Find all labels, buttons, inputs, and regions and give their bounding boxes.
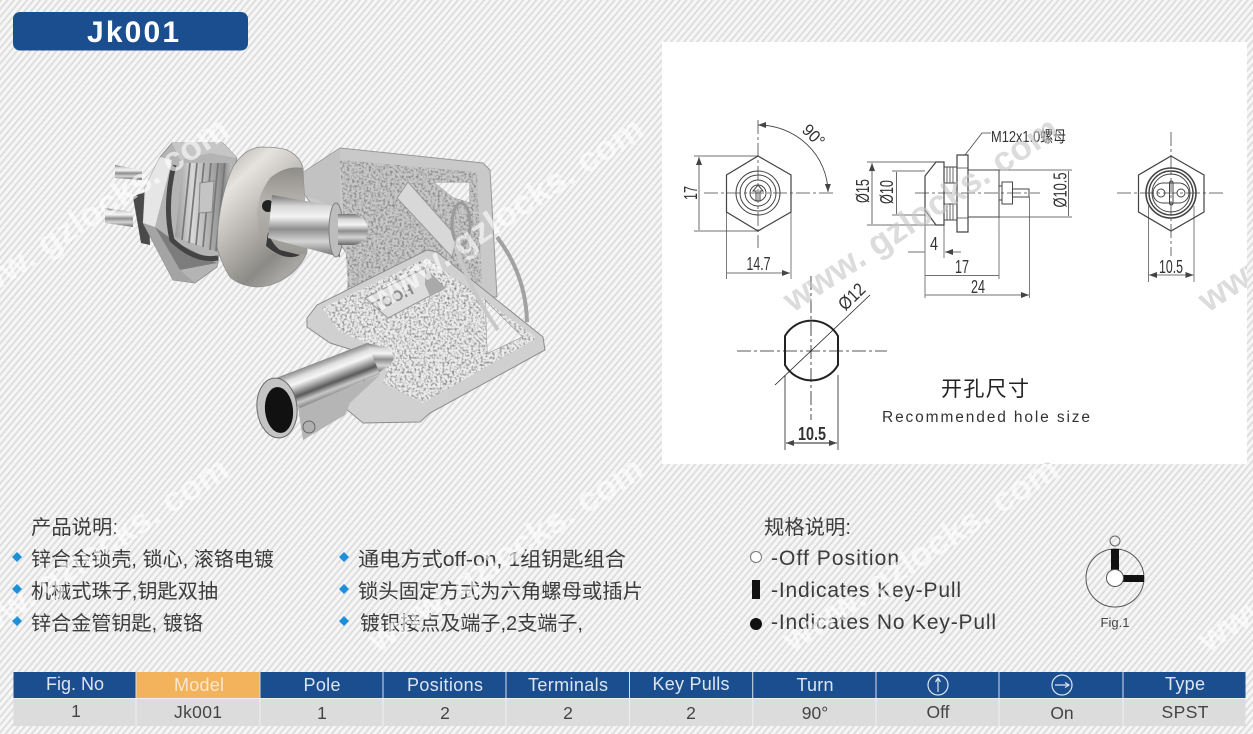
legend: no key pull: -Indicates No Key-Pull bbox=[771, 611, 996, 634]
title badge bbox=[13, 12, 248, 50]
table values: SPST bbox=[1162, 702, 1209, 722]
table header: Key Pulls bbox=[652, 674, 730, 694]
caption: hole size Chinese: 开孔尺寸 bbox=[941, 378, 1029, 401]
drawing: side view bbox=[867, 133, 1072, 298]
label: 90 degrees: 90° bbox=[798, 120, 829, 151]
table header bbox=[14, 672, 1246, 726]
label: 24 length: 24 bbox=[971, 277, 985, 297]
key post bbox=[268, 195, 368, 257]
feature list right: 通电方式off-on, 1组钥匙组合 bbox=[358, 548, 626, 571]
label: 4: 4 bbox=[930, 234, 938, 254]
icon: open circle bbox=[750, 552, 762, 562]
label: 14.7: 14.7 bbox=[746, 254, 770, 274]
title badge: Jk001 bbox=[87, 16, 179, 49]
key tang under tube bbox=[298, 375, 380, 440]
label: rear 10.5: 10.5 bbox=[1159, 257, 1183, 277]
specification table bbox=[13, 672, 1246, 726]
ring through key bbox=[455, 245, 498, 330]
table header: Positions bbox=[407, 675, 483, 695]
label: thread spec: M12x1.0螺母 bbox=[991, 128, 1066, 146]
drawing: recommended hole bbox=[737, 276, 887, 450]
table values: 1 bbox=[317, 703, 327, 723]
label: diameter 12: Ø12 bbox=[834, 279, 870, 314]
label: 17 length: 17 bbox=[955, 257, 969, 277]
figure 1 diagram bbox=[1086, 536, 1144, 630]
drawing: front view with 90 degree turn bbox=[694, 120, 834, 279]
ring behind front key bbox=[452, 203, 527, 322]
table values: 2 bbox=[563, 703, 573, 723]
table values: 2 bbox=[686, 703, 696, 723]
icon: on arrow bbox=[1052, 675, 1072, 695]
feature list right: 镀银接点及端子,2支端子, bbox=[360, 612, 583, 635]
feature list left bbox=[31, 548, 274, 635]
figure 1 diagram: Fig.1 bbox=[1101, 615, 1129, 630]
feature list right bbox=[358, 548, 643, 635]
feature list right: 锁头固定方式为六角螺母或插片 bbox=[358, 580, 643, 603]
product description bbox=[12, 516, 643, 635]
label: diameter 15: Ø15 bbox=[853, 179, 873, 203]
table values bbox=[13, 698, 1246, 726]
table header: Turn bbox=[796, 675, 834, 695]
table values: 1 bbox=[71, 701, 81, 721]
heading: 产品说明: bbox=[31, 516, 118, 539]
terminal pins bbox=[105, 165, 142, 227]
bullet icons bbox=[12, 552, 349, 626]
domed lock cap bbox=[217, 147, 307, 287]
legend: off position: -Off Position bbox=[771, 547, 899, 570]
icon: black dot bbox=[750, 618, 762, 630]
hex nut bbox=[133, 143, 237, 283]
product photo: key switch and keys bbox=[105, 143, 545, 440]
icon: black bar bbox=[752, 580, 760, 599]
back key bbox=[302, 148, 497, 297]
heading: 规格说明: bbox=[764, 516, 851, 539]
panel: technical drawing bbox=[662, 42, 1247, 464]
table header: Pole bbox=[304, 675, 340, 695]
feature list left: 机械式珠子,钥匙双抽 bbox=[31, 580, 218, 603]
feature list left: 锌合金锁壳, 锁心, 滚铬电镀 bbox=[31, 548, 274, 571]
table header: Terminals bbox=[528, 675, 608, 695]
watermark over drawing panel: www. gzlocks. com bbox=[775, 109, 1066, 320]
front key: TOOH bbox=[370, 281, 416, 316]
table header: Type bbox=[1165, 674, 1205, 694]
watermarks: www. gzlocks. com bbox=[775, 449, 1066, 660]
label: diameter 10: Ø10 bbox=[877, 180, 897, 204]
watermarks: www. gzlocks. com bbox=[360, 109, 651, 320]
front key bbox=[307, 250, 545, 423]
label: 17: 17 bbox=[681, 186, 701, 200]
table values: 90° bbox=[802, 703, 828, 723]
feature list left: 锌合金管钥匙, 镀铬 bbox=[31, 612, 203, 635]
specification legend bbox=[750, 516, 996, 634]
label: diameter 10.5: Ø10.5 bbox=[1050, 172, 1070, 208]
table values: Off bbox=[926, 702, 950, 722]
watermark over drawing panel: www. gzlocks. com bbox=[775, 449, 1066, 660]
icon: off arrow bbox=[928, 675, 948, 695]
table header: Fig. No bbox=[46, 674, 104, 694]
table values: 2 bbox=[440, 703, 450, 723]
table header: Model bbox=[174, 675, 224, 695]
table values: Jk001 bbox=[174, 702, 222, 722]
threaded body bbox=[175, 163, 232, 252]
watermarks: www. gzlocks. com bbox=[360, 449, 651, 660]
table values: On bbox=[1050, 703, 1074, 723]
watermarks bbox=[0, 109, 1253, 660]
drawing: rear view bbox=[1117, 132, 1226, 282]
label: hole 10.5: 10.5 bbox=[798, 424, 826, 444]
legend: key pull: -Indicates Key-Pull bbox=[771, 579, 961, 602]
key tube bbox=[254, 343, 394, 440]
watermark over drawing panel bbox=[782, 122, 1247, 464]
caption: hole size English: Recommended hole size bbox=[882, 409, 1090, 426]
